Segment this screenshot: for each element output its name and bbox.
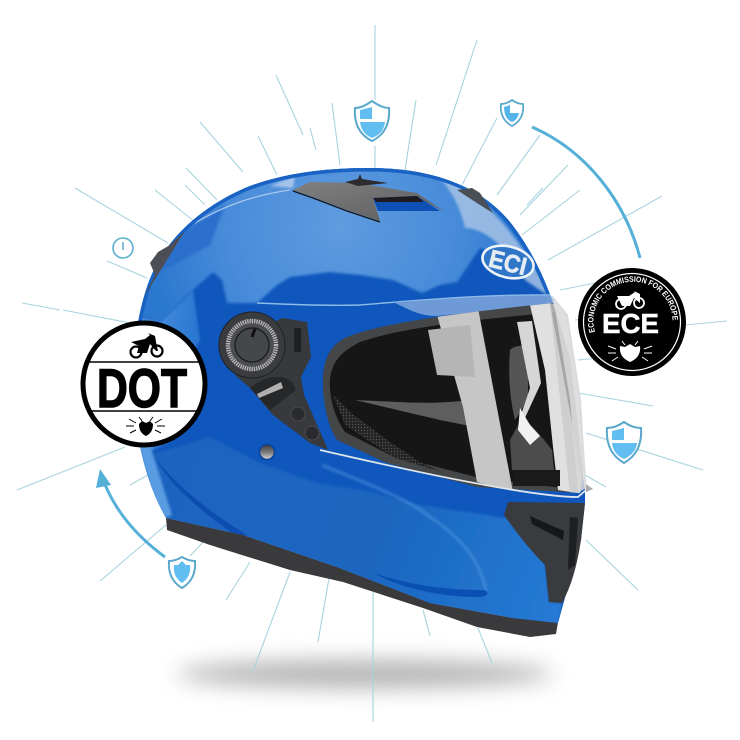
icon: motorcycle white <box>616 291 644 309</box>
icon: shield top right <box>501 100 523 126</box>
helmet <box>130 160 593 637</box>
visor outer edge <box>320 296 586 497</box>
top rear vent <box>457 188 493 213</box>
ECE circular text: ECONOMIC COMMISSION FOR EUROPE <box>588 276 678 333</box>
ground shadow <box>177 660 553 688</box>
shell <box>133 168 585 623</box>
DOT badge <box>83 323 205 445</box>
top vent <box>293 174 445 222</box>
buttons <box>291 407 305 421</box>
upper slider <box>294 328 301 352</box>
icon: shield right <box>607 422 641 463</box>
arc arrow: right <box>532 127 640 258</box>
DOT wordmark: DOT <box>97 357 187 419</box>
visor tab <box>586 484 593 492</box>
visor outer glass <box>553 297 586 493</box>
ECE wordmark: ECE <box>602 308 659 339</box>
chin vent <box>504 502 585 603</box>
visor top edge <box>257 295 550 305</box>
icon: shield bottom left <box>169 557 195 588</box>
bottom rim <box>166 518 558 637</box>
icon: shield top <box>355 101 389 141</box>
arc arrow: left <box>96 469 165 557</box>
visor pale strip <box>395 295 555 316</box>
slider <box>257 382 283 398</box>
icon: shield white <box>608 341 652 362</box>
side pod <box>219 312 328 450</box>
eye port interior <box>330 303 586 494</box>
dial <box>219 312 285 378</box>
icon: clock <box>113 238 133 258</box>
shell surface shading <box>130 160 565 630</box>
rear vent <box>144 231 185 297</box>
metal pivot button <box>260 444 274 460</box>
icon: shield with rays <box>126 417 165 436</box>
eye port <box>323 303 583 493</box>
ECE badge <box>578 268 686 376</box>
helmet logo: ECI <box>486 245 530 281</box>
icon: motorcycle <box>130 333 162 358</box>
